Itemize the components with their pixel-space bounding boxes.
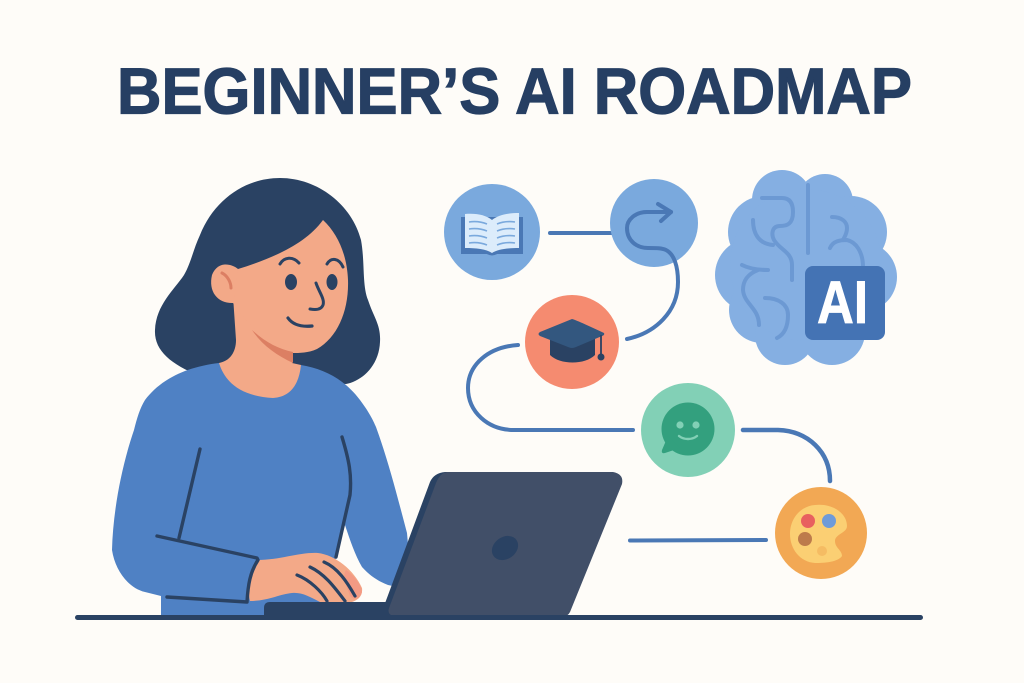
neck xyxy=(219,296,301,398)
sleeve lines xyxy=(157,437,351,602)
title: BEGINNER’S AI ROADMAP xyxy=(117,54,912,128)
hand xyxy=(249,553,362,602)
roadmap connector: grad cap to chat xyxy=(468,345,633,430)
left eye xyxy=(285,274,297,290)
right eyebrow xyxy=(327,259,343,267)
roadmap connector: chat to palette xyxy=(743,430,830,481)
table line xyxy=(75,615,923,620)
icon: brain with AI badge xyxy=(715,170,897,365)
mouth xyxy=(288,318,312,326)
brain shape xyxy=(715,170,897,365)
laptop lid xyxy=(388,472,622,616)
roadmap connector: palette to laptop xyxy=(630,538,766,542)
AI label: AI xyxy=(817,269,868,336)
hair xyxy=(155,178,380,384)
illustration: woman at laptop xyxy=(112,178,622,617)
laptop base xyxy=(264,602,392,617)
neck shadow xyxy=(252,330,293,363)
inner ear xyxy=(222,273,231,288)
face xyxy=(233,220,348,353)
left eyebrow xyxy=(280,258,299,264)
icon: paint palette xyxy=(775,487,867,579)
ear xyxy=(211,264,238,303)
fingertip xyxy=(344,570,362,599)
brain creases xyxy=(742,185,863,338)
AI badge xyxy=(805,266,885,340)
sweater xyxy=(112,363,412,616)
lower torso xyxy=(161,590,271,616)
fingers xyxy=(297,562,355,601)
laptop lid edge xyxy=(384,472,600,617)
roadmap connector: book to arrow xyxy=(550,231,612,235)
roadmap connector: arrow path to grad cap xyxy=(627,204,678,339)
right eye xyxy=(326,274,338,290)
nose xyxy=(310,283,323,310)
icon: open book xyxy=(444,184,540,280)
icon: graduation cap xyxy=(525,295,619,389)
laptop logo xyxy=(487,531,523,565)
icon: arrow circle xyxy=(610,179,698,267)
icon: chat bubble xyxy=(641,383,735,477)
